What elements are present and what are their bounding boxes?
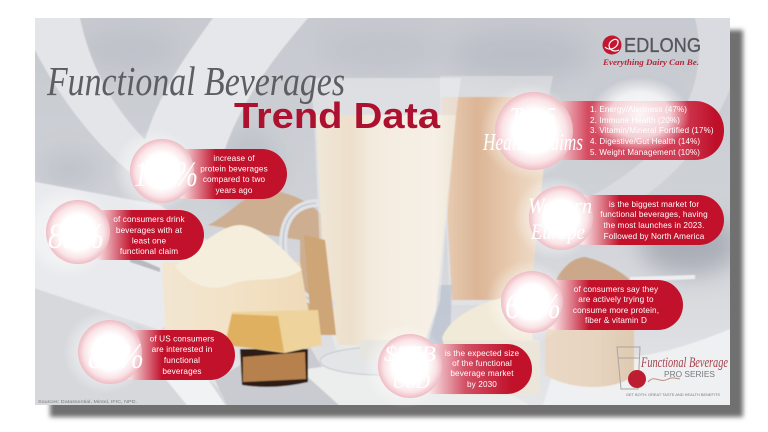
heading: Top 5 Health Claims: Top 5 <box>510 104 556 130</box>
callout: 105% protein: increase of <box>213 154 255 163</box>
callout: $27B USD market size: by 2030 <box>467 380 497 389</box>
callout: 88% US consumers: are interested in <box>152 345 213 354</box>
Functional Beverage Pro Series logo: Functional Beverage <box>640 355 728 371</box>
Edlong logo: Everything Dairy Can Be. <box>602 58 699 67</box>
callout: Western Europe: functional beverages, having <box>600 210 708 219</box>
callout: 88% US consumers: beverages <box>162 367 202 376</box>
list of claims: 2. Immune Health (20%) <box>590 116 680 125</box>
callout: $27B USD market size: USD <box>392 368 430 393</box>
callout: 88% US consumers: of US consumers <box>150 334 214 344</box>
list of claims: 1. Energy/Alertness (47%) <box>590 105 687 114</box>
icon: glass outline <box>617 347 640 389</box>
back glass of chocolate shake <box>423 76 553 345</box>
list of claims: 3. Vitamin/Mineral Fortified (17%) <box>590 126 714 135</box>
icon: red emblem <box>628 370 646 388</box>
list of claims: 4. Digestive/Gut Health (14%) <box>590 137 700 146</box>
callout: $27B USD market size: $27B <box>384 341 436 366</box>
heading: Top 5 Health Claims <box>482 104 583 156</box>
callout: 85% functional claim: of consumers drink <box>113 215 185 224</box>
callout: Western Europe: Europe <box>530 219 585 244</box>
callout: 85% functional claim: least one <box>132 236 166 246</box>
snack bars <box>224 310 322 387</box>
mottled backdrop <box>40 28 740 275</box>
callout: 60% more protein: consume more protein, <box>573 306 659 315</box>
callout: 88% US consumers: 88% <box>88 336 144 376</box>
list of claims <box>590 105 714 157</box>
right powder scoops <box>442 257 695 395</box>
callout: 85% functional claim: functional claim <box>120 247 178 256</box>
callout: $27B USD market size: beverage market <box>450 369 514 378</box>
callout: Western Europe: is the biggest market for <box>609 200 699 209</box>
callout: 88% US consumers <box>63 310 235 394</box>
front glass handle <box>283 203 332 304</box>
Functional Beverage Pro Series logo <box>617 347 728 397</box>
callout: Western Europe: Western <box>528 193 592 218</box>
Functional Beverage Pro Series logo: PRO SERIES <box>664 370 715 379</box>
panel: top 5 health claims <box>480 77 724 179</box>
callout: 60% more protein: of consumers say they <box>574 285 659 294</box>
callout: 85% functional claim: beverages with at <box>116 226 183 235</box>
callout: 60% more protein: fiber & vitamin D <box>585 316 647 325</box>
callout: Western Europe: Followed by North America <box>604 232 705 241</box>
callout: 105% protein <box>113 129 287 213</box>
heading: Top 5 Health Claims: Health Claims <box>482 130 583 156</box>
callout: Western Europe: the most launches in 2023. <box>604 221 704 230</box>
icon: Edlong emblem <box>602 36 622 54</box>
callout: 105% protein: years ago <box>215 186 253 195</box>
callout: 88% US consumers: functional <box>164 356 200 365</box>
left jar with powder <box>162 225 336 335</box>
callout: 85% functional claim <box>22 186 204 278</box>
callout: 105% protein: compared to two <box>203 175 265 184</box>
Edlong logo: EDLONG <box>624 35 701 57</box>
callout: $27B USD market size: of the functional <box>452 359 512 368</box>
callout: Western Europe <box>513 176 724 260</box>
list of claims: 5. Weight Management (10%) <box>590 148 700 157</box>
callout: 85% functional claim: 85% <box>48 216 104 256</box>
brown powder mound behind <box>208 192 322 311</box>
callout: 105% protein: 105% <box>134 154 198 194</box>
callout: 60% more protein: 60% <box>505 286 561 326</box>
callout: 60% more protein <box>486 260 683 344</box>
Edlong logo <box>602 35 701 67</box>
callout: 105% protein: protein beverages <box>200 164 268 174</box>
title: Functional Beverages: Functional Beverages <box>46 58 345 104</box>
white glare over the list <box>590 77 690 153</box>
callout: $27B USD market size <box>363 324 532 408</box>
callout: 60% more protein: are actively trying to <box>578 295 654 304</box>
sources note: Sources: Datassential, Mintel, IFIC, NPD. <box>38 399 137 405</box>
front glass of milk shake <box>310 78 461 375</box>
Functional Beverage Pro Series logo: GET BOTH: GREAT TASTE AND HEALTH BENEFITS <box>626 393 721 397</box>
callout: $27B USD market size: is the expected size <box>445 349 519 358</box>
title: Trend Data: Trend Data <box>234 95 441 136</box>
